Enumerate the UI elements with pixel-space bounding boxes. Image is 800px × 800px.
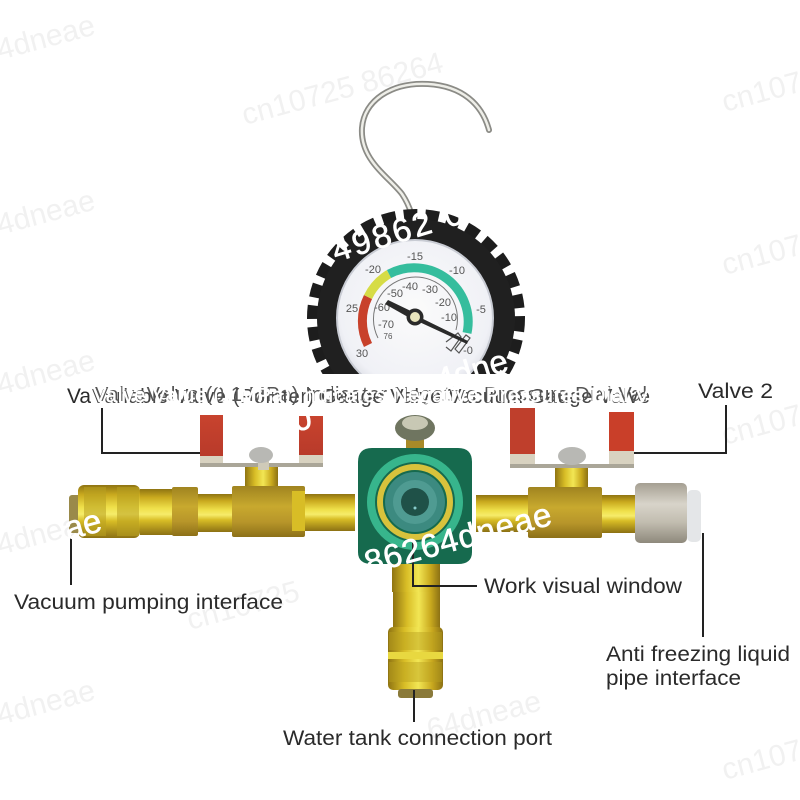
gauge needle bbox=[385, 300, 468, 344]
leader line: work visual window bbox=[413, 540, 477, 586]
label: vacuum pumping interface: Vacuum pumping interface bbox=[14, 591, 283, 614]
white watermark overlays: 86264dneae bbox=[360, 495, 555, 581]
left hex nut bbox=[172, 487, 198, 536]
white watermark overlays bbox=[60, 194, 555, 581]
leader line: water tank port bbox=[413, 690, 415, 722]
bottom coupler tip bbox=[398, 689, 433, 698]
gauge scale numbers: -30 bbox=[422, 284, 438, 296]
leader line: valve 1 bbox=[102, 408, 200, 453]
leader line: anti freezing interface bbox=[702, 533, 704, 637]
garbled overlapping heading label: Valve Value (1 MPa) Indicates Negative Pressures Dial V bbox=[93, 385, 650, 407]
brass ring bbox=[380, 467, 450, 537]
gauge scale numbers bbox=[346, 251, 486, 360]
leader line: valve 2 bbox=[634, 405, 726, 453]
gauge scale numbers: 30 bbox=[356, 348, 368, 360]
gauge scale numbers: 76 bbox=[384, 332, 393, 341]
garbled overlapping heading label: Variable Valve (Pointer) Gauge Valve Vacuum Gauge Valve bbox=[92, 386, 650, 408]
silver push-fit nut bbox=[635, 483, 687, 543]
yellow arc bbox=[368, 274, 389, 297]
left valve handle bbox=[200, 415, 323, 487]
white watermark overlays: 4dne bbox=[431, 342, 512, 399]
gauge rubber gear guard bbox=[313, 215, 519, 421]
gauge scale numbers: -50 bbox=[387, 288, 403, 300]
gauge scale numbers: -60 bbox=[374, 302, 390, 314]
bottom knurled coupler bbox=[388, 627, 443, 690]
white cut-off below gauge bbox=[295, 374, 545, 440]
inner scale arc bbox=[373, 277, 457, 338]
gauge scale numbers: -5 bbox=[476, 304, 486, 316]
top nut of manifold bbox=[395, 415, 435, 450]
gauge scale numbers: -20 bbox=[435, 297, 451, 309]
white watermark overlays: 0 bbox=[288, 398, 316, 439]
anti freezing pipe interface assembly bbox=[476, 483, 701, 543]
faint watermark pattern: cn10725 86264 bbox=[238, 46, 447, 132]
garbled overlapping heading label: Va bbox=[67, 385, 91, 408]
white collar bbox=[687, 490, 701, 542]
garbled overlapping heading label: ValveValue (0.1 MPa) Indicator Negative Pressure Dial Val bbox=[95, 384, 647, 406]
leader line: vacuum pumping interface bbox=[70, 535, 72, 585]
faint watermark pattern: 64dneae bbox=[423, 685, 545, 747]
left pipe bbox=[140, 489, 173, 535]
gauge scale numbers: -40 bbox=[402, 281, 418, 293]
vacuum pumping interface coupler assembly bbox=[69, 485, 355, 538]
label: anti freezing liquid pipe interface: Anti freezing liquid bbox=[606, 643, 790, 666]
red grip right bbox=[299, 416, 323, 456]
right valve handle bbox=[510, 408, 634, 488]
gauge scale numbers: -70 bbox=[378, 319, 394, 331]
white watermark overlays: ae bbox=[60, 502, 105, 547]
green manifold block bbox=[358, 448, 472, 564]
gauge scale numbers: 25 bbox=[346, 303, 358, 315]
label: valve 2: Valve 2 bbox=[698, 380, 773, 403]
gauge scale numbers: -20 bbox=[365, 264, 381, 276]
left knurled coupler bbox=[78, 485, 140, 538]
pressure gauge bbox=[295, 215, 545, 440]
water tank connection assembly bbox=[388, 560, 443, 698]
label: water tank connection port: Water tank connection port bbox=[283, 727, 552, 750]
left coupler tip bbox=[69, 495, 81, 533]
red grip left bbox=[200, 415, 223, 457]
gauge scale numbers: -10 bbox=[441, 312, 457, 324]
red arc bbox=[362, 297, 368, 345]
left valve body bbox=[232, 486, 305, 537]
white watermark overlays: 49862 0 bbox=[327, 194, 467, 269]
gauge zero stop marks bbox=[446, 333, 470, 353]
label: anti freezing liquid pipe interface: pipe interface bbox=[606, 667, 741, 690]
label: anti freezing liquid pipe interface bbox=[606, 643, 790, 690]
label: work visual window: Work visual window bbox=[484, 575, 683, 598]
icon: hanging hook bbox=[362, 84, 489, 240]
gauge scale numbers: -10 bbox=[449, 265, 465, 277]
gauge face bbox=[337, 240, 493, 396]
right valve body bbox=[528, 487, 602, 538]
teal arc bbox=[389, 268, 468, 333]
faint watermark pattern: cn10725 bbox=[183, 575, 303, 637]
gauge scale numbers: -0 bbox=[463, 345, 473, 357]
gauge scale numbers: -15 bbox=[407, 251, 423, 263]
visual window bbox=[385, 472, 445, 532]
green ring bbox=[371, 458, 459, 546]
